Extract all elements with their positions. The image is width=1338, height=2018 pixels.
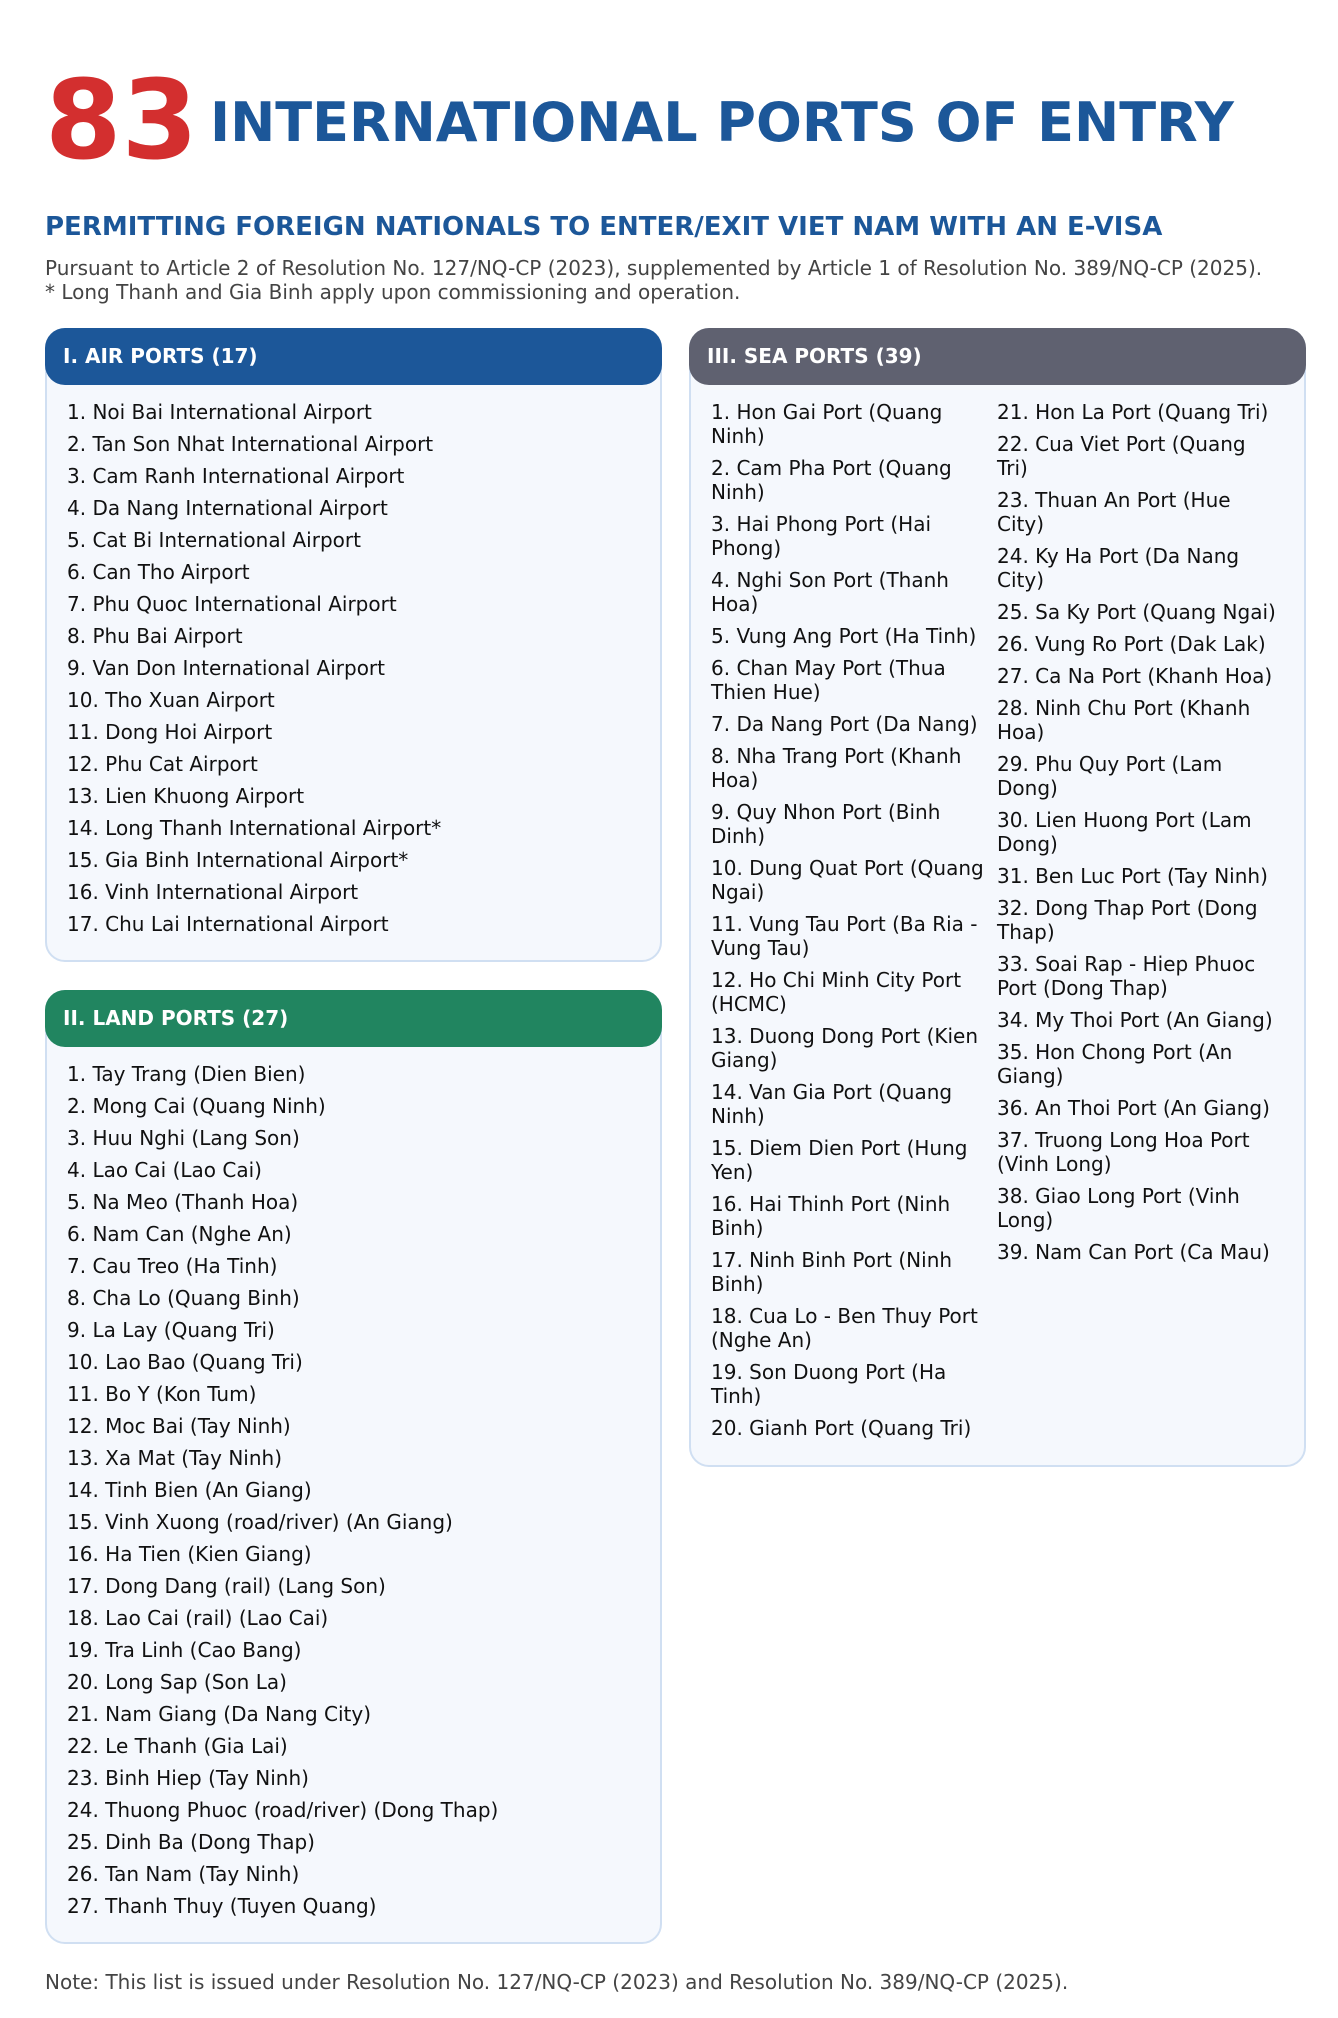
list: sea ports column 1: 7. Da Nang Port (Da Nang): [711, 712, 978, 736]
list: air ports: 11. Dong Hoi Airport: [67, 720, 272, 744]
list: sea ports column 1: (Nghe An): [711, 1328, 812, 1352]
list: air ports: 10. Tho Xuan Airport: [67, 688, 275, 712]
list: sea ports column 1: 16. Hai Thinh Port (Ninh: [711, 1192, 950, 1216]
list: sea ports column 1: Ninh): [711, 1104, 765, 1128]
list: sea ports column 2: Dong): [997, 832, 1058, 856]
list: sea ports column 2: Hoa): [997, 720, 1044, 744]
list: sea ports column 1: Giang): [711, 1048, 777, 1072]
list: sea ports column 1: [710, 400, 984, 1440]
list: sea ports column 2: 35. Hon Chong Port (An: [997, 1040, 1232, 1064]
list: sea ports column 2: 30. Lien Huong Port (Lam: [997, 808, 1252, 832]
list: land ports: 20. Long Sap (Son La): [67, 1670, 287, 1694]
list: sea ports column 2: Long): [997, 1208, 1053, 1232]
list: land ports: 4. Lao Cai (Lao Cai): [67, 1158, 262, 1182]
list: sea ports column 1: 4. Nghi Son Port (Thanh: [711, 568, 949, 592]
list: land ports: 19. Tra Linh (Cao Bang): [67, 1638, 301, 1662]
list: air ports: 14. Long Thanh International Airport*: [67, 816, 441, 840]
list: land ports: 6. Nam Can (Nghe An): [67, 1222, 292, 1246]
list: sea ports column 1: 1. Hon Gai Port (Quang: [711, 400, 942, 424]
list: air ports: 1. Noi Bai International Airport: [67, 400, 372, 424]
list: land ports: 1. Tay Trang (Dien Bien): [67, 1062, 305, 1086]
list: land ports: 23. Binh Hiep (Tay Ninh): [67, 1766, 309, 1790]
legal basis text: [45, 256, 1262, 304]
list: land ports: 2. Mong Cai (Quang Ninh): [67, 1094, 326, 1118]
panel: land ports: [45, 990, 662, 1944]
heading: land ports: II. LAND PORTS (27): [63, 1006, 288, 1030]
list: sea ports column 2: Tri): [997, 456, 1028, 480]
list: land ports: 12. Moc Bai (Tay Ninh): [67, 1414, 291, 1438]
list: land ports: [67, 1062, 498, 1918]
list: sea ports column 1: 13. Duong Dong Port (Kien: [711, 1024, 978, 1048]
list: land ports: 9. La Lay (Quang Tri): [67, 1318, 275, 1342]
list: air ports: 7. Phu Quoc International Airport: [67, 592, 397, 616]
list: sea ports column 2: 31. Ben Luc Port (Tay Ninh): [997, 864, 1268, 888]
list: air ports: 16. Vinh International Airport: [67, 880, 358, 904]
list: sea ports column 1: 9. Quy Nhon Port (Binh: [711, 800, 940, 824]
list: land ports: 11. Bo Y (Kon Tum): [67, 1382, 256, 1406]
list: sea ports column 1: Phong): [711, 536, 781, 560]
list: sea ports column 1: 20. Gianh Port (Quang Tri): [711, 1416, 971, 1440]
list: land ports: 26. Tan Nam (Tay Ninh): [67, 1862, 299, 1886]
subtitle: PERMITTING FOREIGN NATIONALS TO ENTER/EXIT VIET NAM WITH AN E-VISA: [45, 212, 1162, 242]
list: sea ports column 2: 29. Phu Quy Port (Lam: [997, 752, 1222, 776]
list: air ports: 8. Phu Bai Airport: [67, 624, 243, 648]
list: sea ports column 1: Ninh): [711, 480, 765, 504]
list: land ports: 8. Cha Lo (Quang Binh): [67, 1286, 300, 1310]
list: sea ports column 1: Dinh): [711, 824, 765, 848]
list: land ports: 14. Tinh Bien (An Giang): [67, 1478, 312, 1502]
list: sea ports column 1: 2. Cam Pha Port (Quang: [711, 456, 952, 480]
panel: sea ports: [689, 328, 1306, 1467]
list: sea ports column 2: 24. Ky Ha Port (Da Nang: [997, 544, 1239, 568]
list: sea ports column 2: City): [997, 512, 1044, 536]
list: sea ports column 1: (HCMC): [711, 992, 787, 1016]
list: sea ports column 1: Thien Hue): [711, 680, 821, 704]
list: land ports: 16. Ha Tien (Kien Giang): [67, 1542, 312, 1566]
list: sea ports column 1: 6. Chan May Port (Thua: [711, 656, 946, 680]
list: air ports: 3. Cam Ranh International Airport: [67, 464, 404, 488]
heading: land ports: [45, 990, 662, 1047]
list: sea ports column 1: 19. Son Duong Port (Ha: [711, 1360, 946, 1384]
list: sea ports column 1: Tinh): [711, 1384, 761, 1408]
list: sea ports column 2: 37. Truong Long Hoa Port: [997, 1128, 1250, 1152]
list: sea ports column 2: 22. Cua Viet Port (Quang: [997, 432, 1246, 456]
heading: air ports: I. AIR PORTS (17): [63, 344, 258, 368]
list: air ports: 5. Cat Bi International Airport: [67, 528, 361, 552]
list: sea ports column 2: Thap): [997, 920, 1055, 944]
list: sea ports column 1: 8. Nha Trang Port (Khanh: [711, 744, 961, 768]
list: sea ports column 1: Ngai): [711, 880, 764, 904]
list: sea ports column 2: 27. Ca Na Port (Khanh Hoa): [997, 664, 1272, 688]
list: sea ports column 1: Binh): [711, 1216, 763, 1240]
list: air ports: 6. Can Tho Airport: [67, 560, 250, 584]
list: land ports: 15. Vinh Xuong (road/river) (An Giang): [67, 1510, 453, 1534]
list: air ports: 2. Tan Son Nhat International Airport: [67, 432, 433, 456]
list: sea ports column 2: 38. Giao Long Port (Vinh: [997, 1184, 1240, 1208]
list: sea ports column 1: 5. Vung Ang Port (Ha Tinh): [711, 624, 976, 648]
list: sea ports column 2: 26. Vung Ro Port (Dak Lak): [997, 632, 1266, 656]
big number 83: 83: [45, 56, 198, 184]
list: land ports: 24. Thuong Phuoc (road/river) (Dong Thap): [67, 1798, 498, 1822]
list: air ports: 4. Da Nang International Airport: [67, 496, 388, 520]
list: sea ports column 2: City): [997, 568, 1044, 592]
list: sea ports column 1: Yen): [711, 1160, 753, 1184]
list: sea ports column 2: 32. Dong Thap Port (Dong: [997, 896, 1258, 920]
legal basis text: Pursuant to Article 2 of Resolution No. 127/NQ-CP (2023), supplemented by Article 1 of Resolution No. 389/NQ-CP (2025).: [45, 256, 1262, 280]
list: land ports: 3. Huu Nghi (Lang Son): [67, 1126, 300, 1150]
list: sea ports column 2: 23. Thuan An Port (Hue: [997, 488, 1231, 512]
list: sea ports column 1: 17. Ninh Binh Port (Ninh: [711, 1248, 952, 1272]
title: INTERNATIONAL PORTS OF ENTRY: [210, 91, 1234, 154]
list: sea ports column 1: 14. Van Gia Port (Quang: [711, 1080, 952, 1104]
panel: air ports: [45, 328, 662, 962]
list: land ports: 5. Na Meo (Thanh Hoa): [67, 1190, 298, 1214]
list: land ports: 27. Thanh Thuy (Tuyen Quang): [67, 1894, 376, 1918]
list: sea ports column 1: 18. Cua Lo - Ben Thuy Port: [711, 1304, 978, 1328]
heading: air ports: [45, 328, 662, 385]
list: air ports: 9. Van Don International Airport: [67, 656, 385, 680]
list: air ports: [67, 400, 441, 936]
list: land ports: 7. Cau Treo (Ha Tinh): [67, 1254, 277, 1278]
list: sea ports column 1: 11. Vung Tau Port (Ba Ria -: [711, 912, 978, 936]
list: sea ports column 1: 3. Hai Phong Port (Hai: [711, 512, 931, 536]
list: land ports: 21. Nam Giang (Da Nang City): [67, 1702, 371, 1726]
list: air ports: 15. Gia Binh International Airport*: [67, 848, 408, 872]
list: land ports: 22. Le Thanh (Gia Lai): [67, 1734, 288, 1758]
list: sea ports column 2: 21. Hon La Port (Quang Tri): [997, 400, 1268, 424]
list: sea ports column 2: 28. Ninh Chu Port (Khanh: [997, 696, 1250, 720]
list: sea ports column 2: [996, 400, 1276, 1264]
list: sea ports column 2: Giang): [997, 1064, 1063, 1088]
list: sea ports column 1: Hoa): [711, 592, 758, 616]
list: land ports: 17. Dong Dang (rail) (Lang Son): [67, 1574, 386, 1598]
list: land ports: 10. Lao Bao (Quang Tri): [67, 1350, 303, 1374]
list: sea ports column 2: 25. Sa Ky Port (Quang Ngai): [997, 600, 1276, 624]
list: air ports: 12. Phu Cat Airport: [67, 752, 258, 776]
list: land ports: 25. Dinh Ba (Dong Thap): [67, 1830, 315, 1854]
list: land ports: 18. Lao Cai (rail) (Lao Cai): [67, 1606, 328, 1630]
list: air ports: 17. Chu Lai International Airport: [67, 912, 389, 936]
heading: sea ports: [689, 328, 1306, 385]
list: sea ports column 2: 39. Nam Can Port (Ca Mau): [997, 1240, 1270, 1264]
list: air ports: 13. Lien Khuong Airport: [67, 784, 304, 808]
list: sea ports column 2: Dong): [997, 776, 1058, 800]
legal basis text: * Long Thanh and Gia Binh apply upon commissioning and operation.: [45, 280, 740, 304]
list: sea ports column 1: Hoa): [711, 768, 758, 792]
list: sea ports column 1: 12. Ho Chi Minh City Port: [711, 968, 961, 992]
list: sea ports column 2: (Vinh Long): [997, 1152, 1112, 1176]
list: sea ports column 2: 33. Soai Rap - Hiep Phuoc: [997, 952, 1255, 976]
list: sea ports column 2: 34. My Thoi Port (An Giang): [997, 1008, 1273, 1032]
list: sea ports column 2: Port (Dong Thap): [997, 976, 1168, 1000]
list: sea ports column 1: Binh): [711, 1272, 763, 1296]
list: sea ports column 1: Vung Tau): [711, 936, 809, 960]
list: sea ports column 1: 15. Diem Dien Port (Hung: [711, 1136, 967, 1160]
list: sea ports column 1: Ninh): [711, 424, 765, 448]
list: land ports: 13. Xa Mat (Tay Ninh): [67, 1446, 282, 1470]
footer note: Note: This list is issued under Resolution No. 127/NQ-CP (2023) and Resolution No. 389/NQ-CP (2025).: [45, 1970, 1068, 1994]
list: sea ports column 1: 10. Dung Quat Port (Quang: [711, 856, 984, 880]
list: sea ports column 2: 36. An Thoi Port (An Giang): [997, 1096, 1270, 1120]
heading: sea ports: III. SEA PORTS (39): [707, 344, 922, 368]
